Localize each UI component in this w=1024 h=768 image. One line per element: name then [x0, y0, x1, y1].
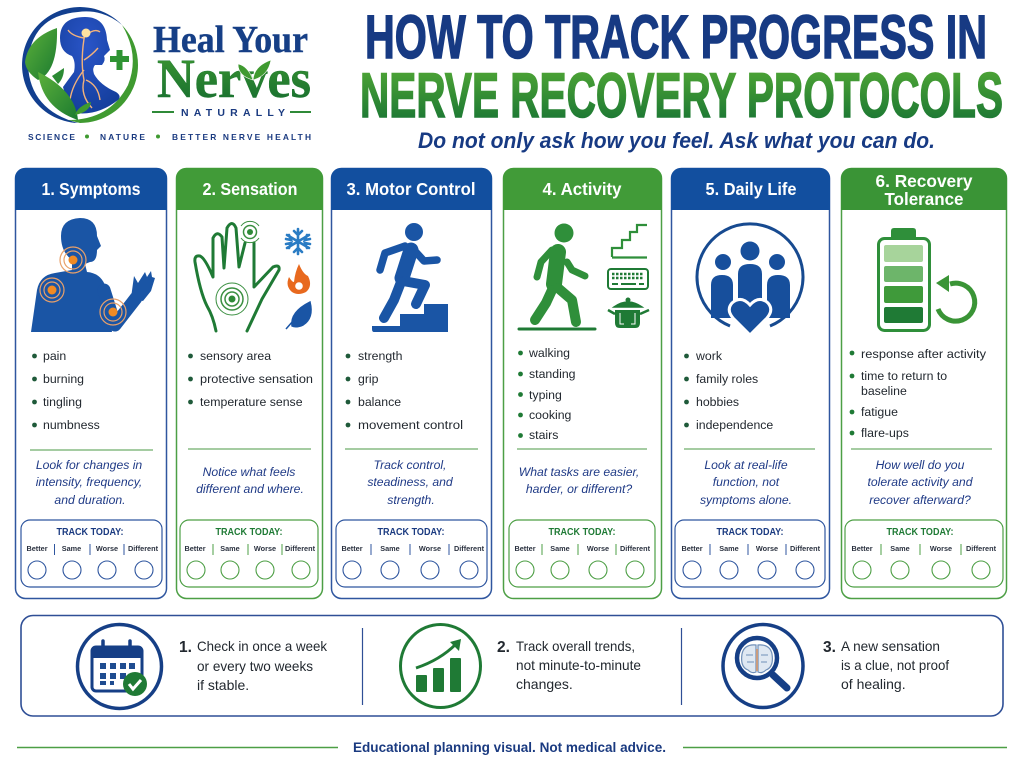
list: symptoms: pain [43, 349, 66, 363]
tracker: motor control: Same [380, 544, 400, 553]
list: sensation [188, 349, 313, 409]
list: symptoms: burning [43, 372, 84, 386]
tracker: symptoms [21, 520, 162, 587]
logo tagline: SCIENCE [28, 132, 75, 142]
icon: calendar check [78, 624, 162, 708]
title [360, 3, 1003, 153]
tracker: daily life: Different [790, 544, 821, 553]
tip 3 text [823, 638, 949, 692]
tracker: symptoms: Worse [96, 544, 118, 553]
heading: Daily Life [671, 168, 830, 210]
list: motor control: grip [358, 372, 379, 386]
list: daily life: independence [696, 418, 773, 432]
icon: snowflake [286, 229, 310, 254]
icon: walking person with tasks [519, 224, 649, 329]
tracker: symptoms: TRACK TODAY: [56, 526, 124, 538]
tracker: daily life: Same [719, 544, 739, 553]
note: recovery tolerance: recover afterward? [869, 493, 971, 507]
list: motor control: strength [358, 349, 403, 363]
list: activity [518, 346, 576, 442]
tip 2 text: 2. [497, 639, 510, 656]
icon: family with heart [697, 224, 803, 335]
panel: 3. Motor Control [331, 168, 492, 598]
list: symptoms [32, 349, 100, 432]
note: recovery tolerance [867, 458, 974, 507]
tip 2 text: Track overall trends, [516, 638, 635, 654]
footer: Educational planning visual. Not medical advice. [353, 739, 666, 755]
tracker: daily life: TRACK TODAY: [716, 526, 784, 538]
tracker: activity: Different [620, 544, 651, 553]
icon: rising trend chart [400, 624, 480, 708]
tip 1 text: 1. [179, 639, 192, 656]
heading: Activity: 4. Activity [542, 179, 622, 199]
tracker: motor control: Better [341, 544, 363, 553]
tracker: activity: TRACK TODAY: [548, 526, 616, 538]
tip 1 text [179, 638, 328, 693]
tracker: recovery tolerance: Better [851, 544, 873, 553]
tip 3 text: 3. [823, 639, 836, 656]
tracker: recovery tolerance: Worse [930, 544, 952, 553]
icon: battery with recovery arrow [878, 228, 975, 330]
note: activity: harder, or different? [526, 482, 632, 496]
list: daily life [684, 349, 773, 432]
tracker: motor control: Worse [419, 544, 441, 553]
tracker: activity: Worse [587, 544, 609, 553]
list: daily life: family roles [696, 372, 758, 386]
tracker: motor control: Different [454, 544, 485, 553]
heading: Recovery Tolerance: Tolerance [884, 189, 964, 209]
heading: Motor Control: 3. Motor Control [346, 179, 476, 199]
list: sensation: sensory area [200, 349, 271, 363]
list: recovery tolerance: time to return to [861, 369, 947, 383]
tracker: recovery tolerance: Different [966, 544, 997, 553]
heading: Recovery Tolerance: 6. Recovery [876, 171, 973, 191]
heading: Activity [503, 168, 662, 210]
tracker: sensation: Different [285, 544, 316, 553]
logo wordmark: Naturally: NATURALLY [181, 107, 285, 119]
tracker: activity: Better [514, 544, 536, 553]
note: daily life: function, not [713, 475, 780, 489]
logo wordmark: Heal Your: Heal Your [153, 19, 308, 61]
note: activity: What tasks are easier, [519, 465, 639, 479]
note: recovery tolerance: tolerate activity and [867, 475, 974, 489]
icon: flame [288, 264, 310, 294]
icon: person climbing stairs [372, 223, 448, 332]
list: motor control [346, 349, 463, 432]
tracker: motor control [336, 520, 487, 587]
icon: cooking pot [608, 298, 649, 328]
note: motor control [367, 458, 454, 507]
tracker: activity: Same [550, 544, 570, 553]
panel: 5. Daily Life [671, 168, 830, 598]
panel: 1. Symptoms [15, 168, 167, 598]
note: motor control: Track control, [374, 458, 446, 472]
heading: Symptoms [15, 168, 167, 210]
logo emblem [22, 7, 138, 123]
tracker: recovery tolerance [845, 520, 1003, 587]
tracker: sensation: TRACK TODAY: [216, 526, 282, 538]
tracker: symptoms: Different [128, 544, 159, 553]
list: activity: cooking [529, 408, 572, 422]
note: sensation [196, 465, 304, 496]
tracker: recovery tolerance: Same [890, 544, 910, 553]
tracker: recovery tolerance: TRACK TODAY: [886, 526, 954, 538]
tracker: daily life: Worse [756, 544, 778, 553]
list: motor control: balance [358, 395, 401, 409]
note: daily life [700, 458, 792, 507]
list: activity: stairs [529, 428, 558, 442]
tracker: daily life: Better [681, 544, 703, 553]
list: symptoms: numbness [43, 418, 100, 432]
note: symptoms: Look for changes in [36, 458, 142, 472]
panel: tips [21, 616, 1003, 716]
list: sensation: protective sensation [200, 372, 313, 386]
tip 3 text: A new sensation [841, 638, 940, 654]
heading: Motor Control [331, 168, 492, 210]
tracker: activity [509, 520, 655, 587]
heading: Sensation: 2. Sensation [202, 179, 298, 199]
tracker: sensation [180, 520, 318, 587]
logo [22, 7, 311, 142]
note: symptoms: intensity, frequency, [36, 475, 142, 489]
list: sensation: temperature sense [200, 395, 303, 409]
note: sensation: different and where. [196, 482, 304, 496]
icon: sprout on wordmark [238, 60, 271, 80]
tip 2 text: not minute-to-minute [516, 657, 641, 673]
list: daily life: work [695, 349, 723, 363]
note: sensation: Notice what feels [203, 465, 295, 479]
list: motor control: movement control [358, 418, 463, 432]
list: recovery tolerance [850, 347, 987, 440]
note: motor control: strength. [387, 493, 435, 507]
tracker: sensation: Same [220, 544, 240, 553]
subtitle: Do not only ask how you feel. Ask what you can do. [418, 128, 935, 153]
note: motor control: steadiness, and [367, 475, 454, 489]
tip 3 text: is a clue, not proof [841, 657, 949, 673]
heading: Symptoms: 1. Symptoms [42, 179, 141, 199]
tracker: daily life [675, 520, 825, 587]
logo tagline: BETTER NERVE HEALTH [172, 132, 311, 142]
note: symptoms: and duration. [54, 493, 126, 507]
icon: brain under magnifier [723, 624, 803, 708]
logo tagline: NATURE [100, 132, 145, 142]
tip 1 text: if stable. [197, 677, 249, 693]
tracker: motor control: TRACK TODAY: [378, 526, 444, 538]
note: symptoms [36, 458, 142, 507]
tip 2 text [497, 638, 641, 692]
icon: body with pain points [31, 218, 155, 332]
list: recovery tolerance: response after activity [861, 347, 987, 361]
note: daily life: Look at real-life [704, 458, 788, 472]
heading: Daily Life: 5. Daily Life [706, 179, 797, 199]
list: recovery tolerance: fatigue [861, 405, 898, 419]
list: activity: standing [529, 367, 576, 381]
logo wordmark: Nerves: Nerves [157, 48, 311, 109]
icon: stairs [612, 225, 647, 258]
note: daily life: symptoms alone. [700, 493, 792, 507]
note: activity [519, 465, 639, 496]
heading: Recovery Tolerance [841, 168, 1007, 210]
tip 1 text: or every two weeks [197, 658, 313, 674]
icon: feather [286, 302, 311, 329]
list: recovery tolerance: baseline [861, 384, 907, 398]
logo tagline [28, 132, 311, 142]
list: symptoms: tingling [43, 395, 82, 409]
list: daily life: hobbies [696, 395, 739, 409]
tip 3 text: of healing. [841, 676, 906, 692]
icon: keyboard [608, 269, 648, 289]
panel: 4. Activity [503, 168, 662, 598]
tracker: sensation: Better [184, 544, 206, 553]
tracker: sensation: Worse [254, 544, 276, 553]
tip 1 text: Check in once a week [197, 638, 328, 654]
icon: hand with sensation rings [195, 221, 311, 331]
list: activity: walking [528, 346, 570, 360]
note: recovery tolerance: How well do you [876, 458, 965, 472]
tracker: symptoms: Better [26, 544, 48, 553]
list: recovery tolerance: flare-ups [861, 426, 909, 440]
panel: 2. Sensation [176, 168, 323, 598]
tip 2 text: changes. [516, 676, 573, 692]
tracker: symptoms: Same [62, 544, 81, 553]
list: activity: typing [529, 388, 562, 402]
heading: Sensation [176, 168, 323, 210]
panel: 6. Recovery Tolerance [841, 168, 1007, 598]
